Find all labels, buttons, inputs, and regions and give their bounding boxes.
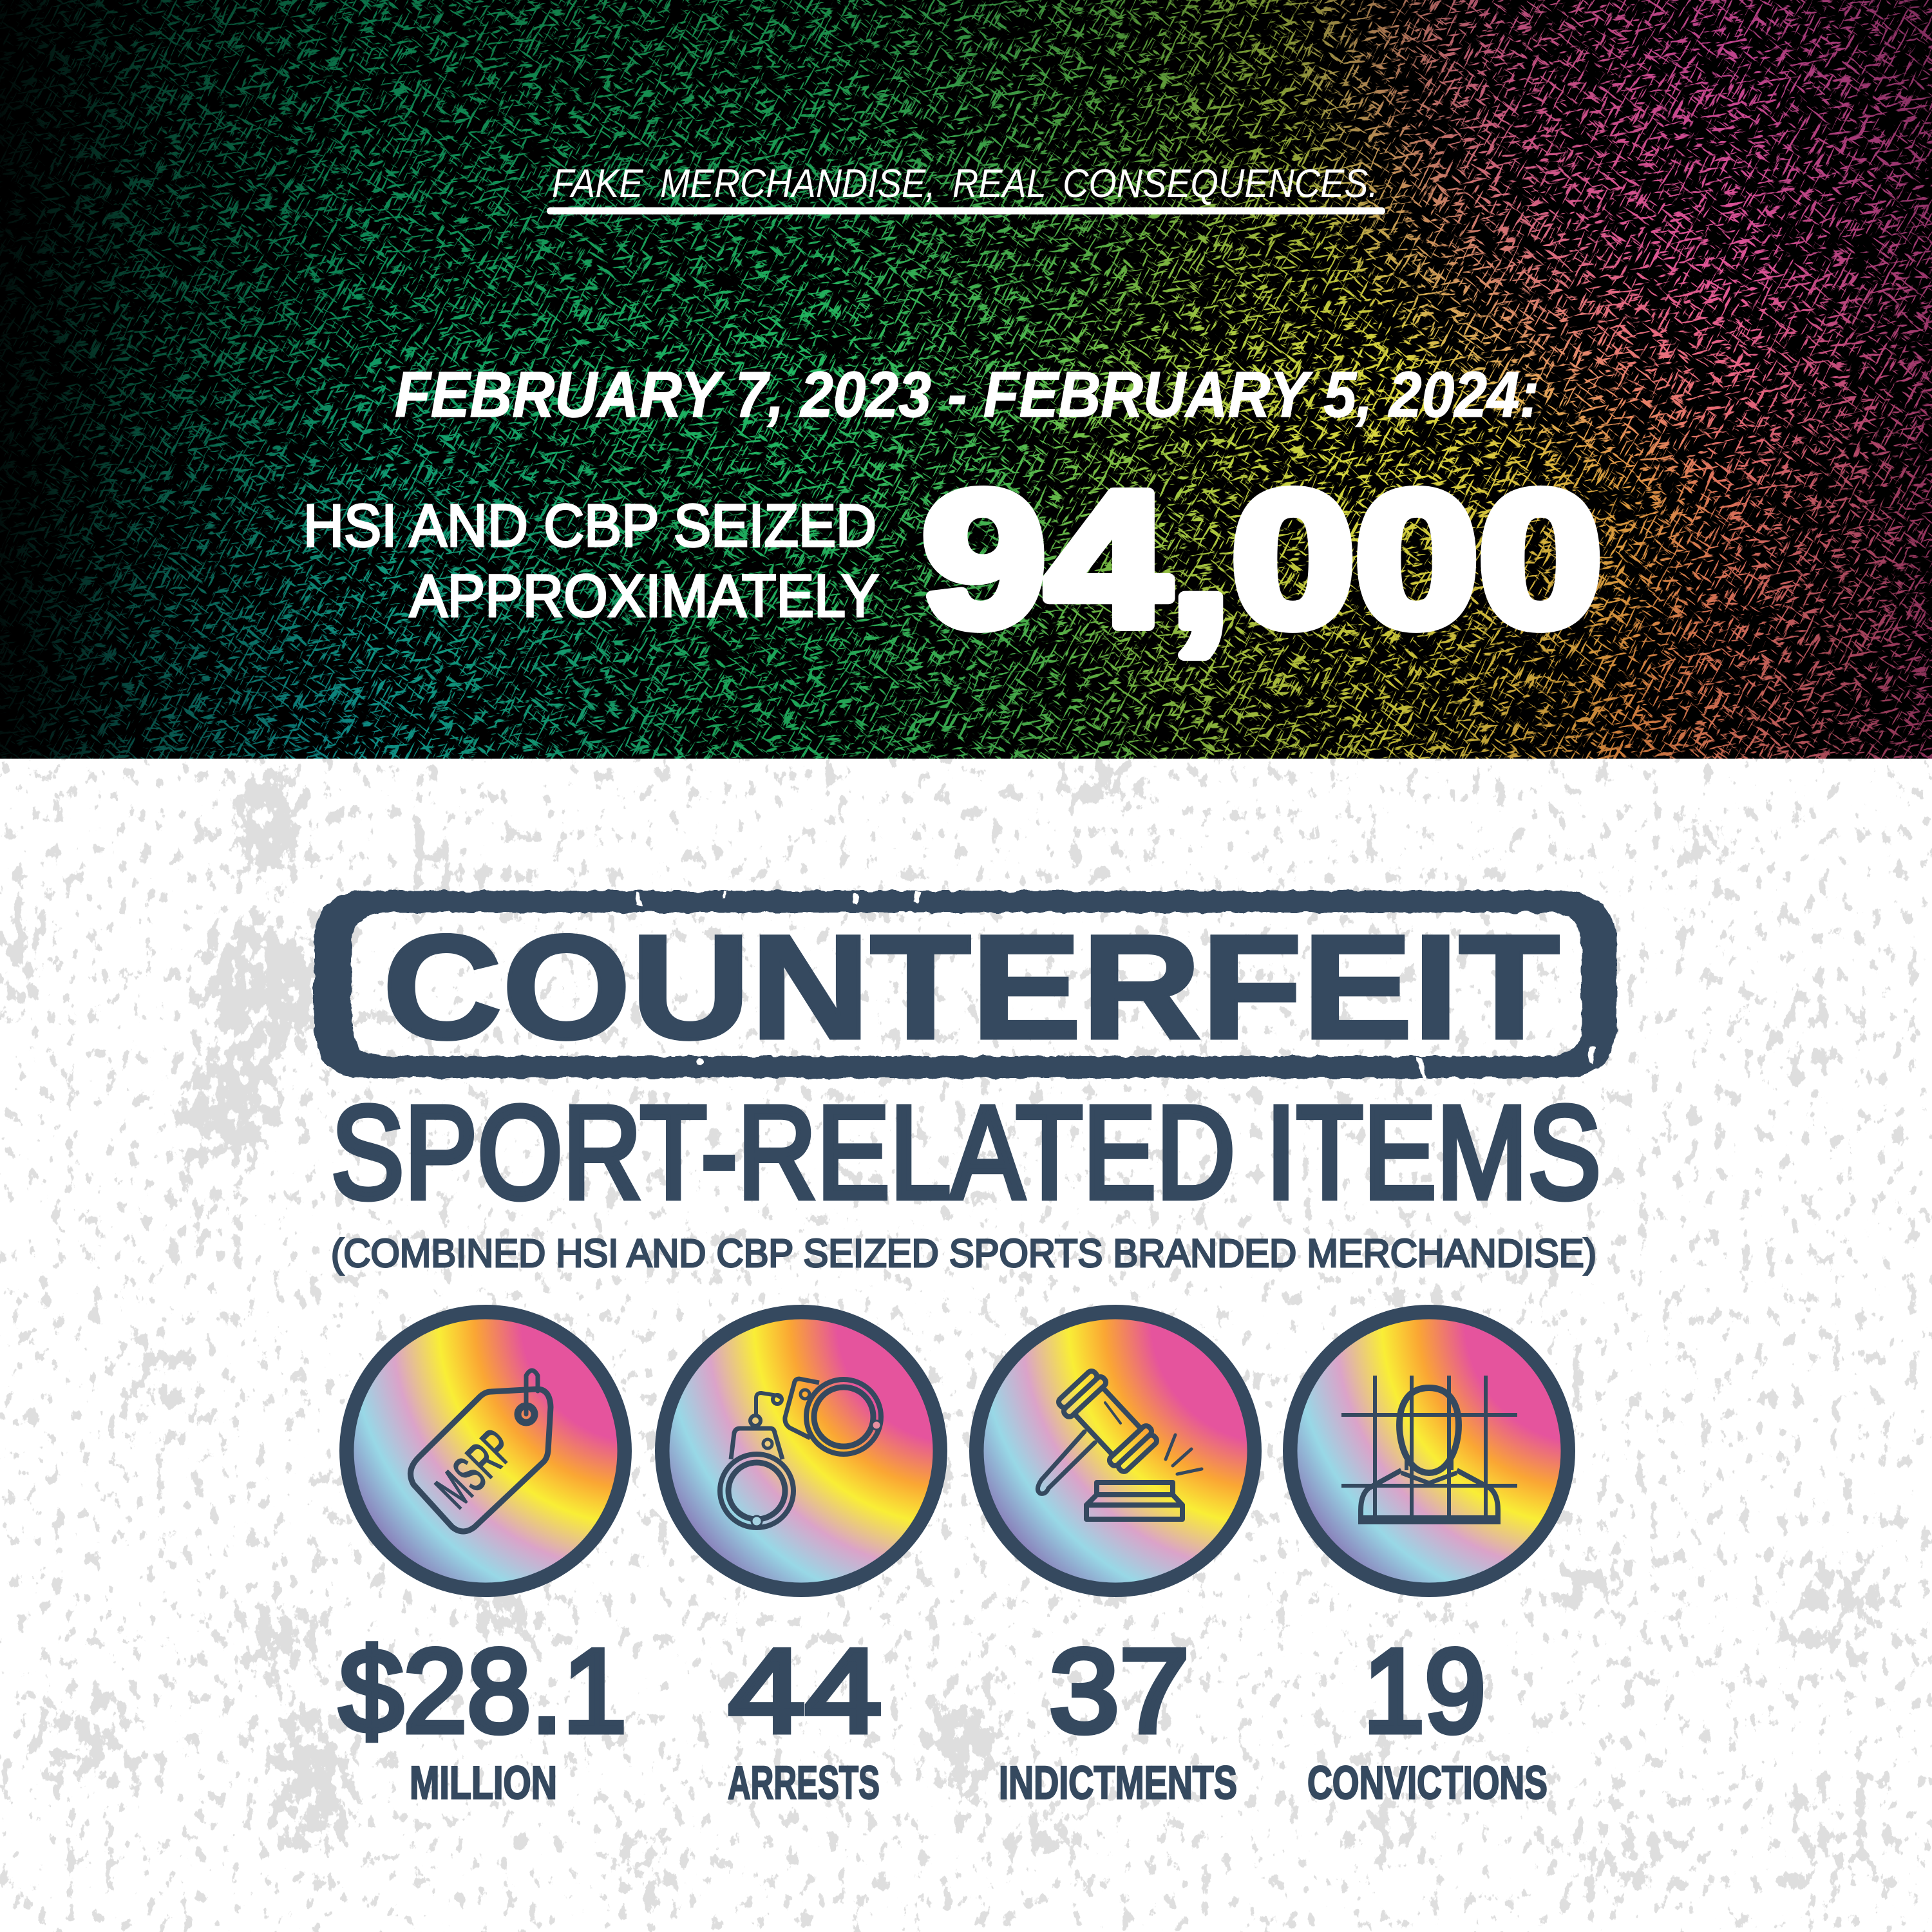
icon: MSRP price tag [339, 1305, 632, 1597]
subheading: (COMBINED HSI AND CBP SEIZED SPORTS BRANDED MERCHANDISE) [331, 1231, 1596, 1275]
grunge texture background [0, 759, 1932, 1932]
tagline: FAKE MERCHANDISE, REAL CONSEQUENCES. [552, 162, 1378, 206]
icon: gavel [969, 1305, 1262, 1597]
date range heading: FEBRUARY 7, 2023 - FEBRUARY 5, 2024: [395, 359, 1539, 431]
seized approximately text: HSI AND CBP SEIZED [303, 492, 876, 559]
icon: handcuffs [655, 1305, 947, 1597]
stat: 37 indictments: INDICTMENTS [999, 1757, 1237, 1809]
seized approximately text: APPROXIMATELY [410, 562, 879, 629]
stat: 44 arrests: 44 [728, 1624, 882, 1757]
big number 94,000: 94,000 [922, 452, 1602, 667]
stat: $28.1 million: MILLION [410, 1757, 557, 1809]
word COUNTERFEIT: COUNTERFEIT [383, 904, 1560, 1070]
seized approximately text [303, 492, 879, 629]
stat: 19 convictions: CONVICTIONS [1307, 1757, 1548, 1809]
panel: dark textured header [0, 0, 1932, 759]
stamp: counterfeit [314, 891, 1616, 1081]
stat: 44 arrests [728, 1624, 882, 1809]
heading: sport-related items: SPORT-RELATED ITEMS [331, 1079, 1601, 1226]
stat: 37 indictments [999, 1624, 1237, 1809]
stat: 19 convictions: 19 [1363, 1624, 1486, 1757]
icon: MSRP price tag: MSRP [425, 1419, 525, 1519]
icon: prisoner behind bars [1283, 1305, 1575, 1597]
stat: $28.1 million: $28.1 [339, 1624, 627, 1757]
stat: 19 convictions [1307, 1624, 1548, 1809]
stat: 44 arrests: ARRESTS [728, 1757, 880, 1809]
stat: 37 indictments: 37 [1049, 1624, 1189, 1757]
stamp frame [314, 891, 1616, 1081]
